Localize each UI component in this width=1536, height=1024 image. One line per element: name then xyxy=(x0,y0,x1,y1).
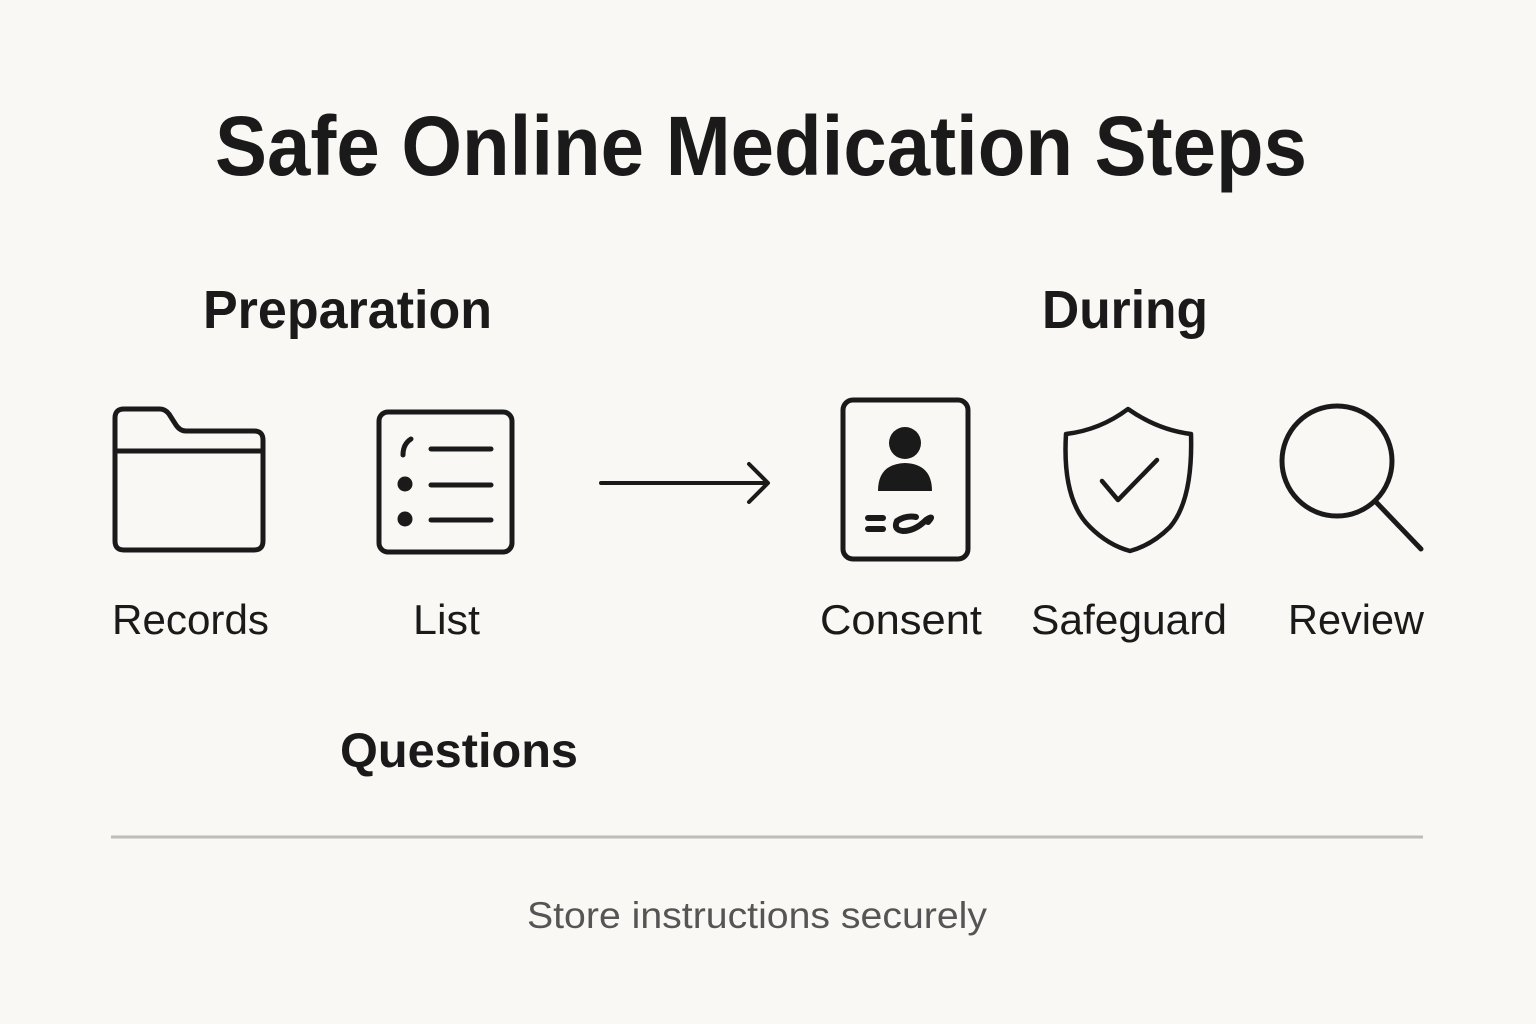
label: Safeguard: Safeguard xyxy=(1031,596,1227,643)
label: Consent: Consent xyxy=(820,596,982,643)
footer note: Store instructions securely xyxy=(527,895,988,936)
icon: shield xyxy=(1066,409,1191,551)
heading: Preparation: Preparation xyxy=(203,280,492,340)
icon: magnifier xyxy=(1282,406,1421,549)
title: Safe Online Medication Steps xyxy=(215,99,1307,193)
icon: list xyxy=(379,412,512,552)
label: Questions: Questions xyxy=(340,725,578,778)
heading: During: During xyxy=(1042,280,1208,340)
label: Review: Review xyxy=(1288,596,1425,643)
arrow xyxy=(601,464,768,502)
label: Records: Records xyxy=(112,596,269,643)
icon: consent form xyxy=(843,400,968,559)
label: List: List xyxy=(413,596,480,643)
icon: folder xyxy=(115,409,263,550)
